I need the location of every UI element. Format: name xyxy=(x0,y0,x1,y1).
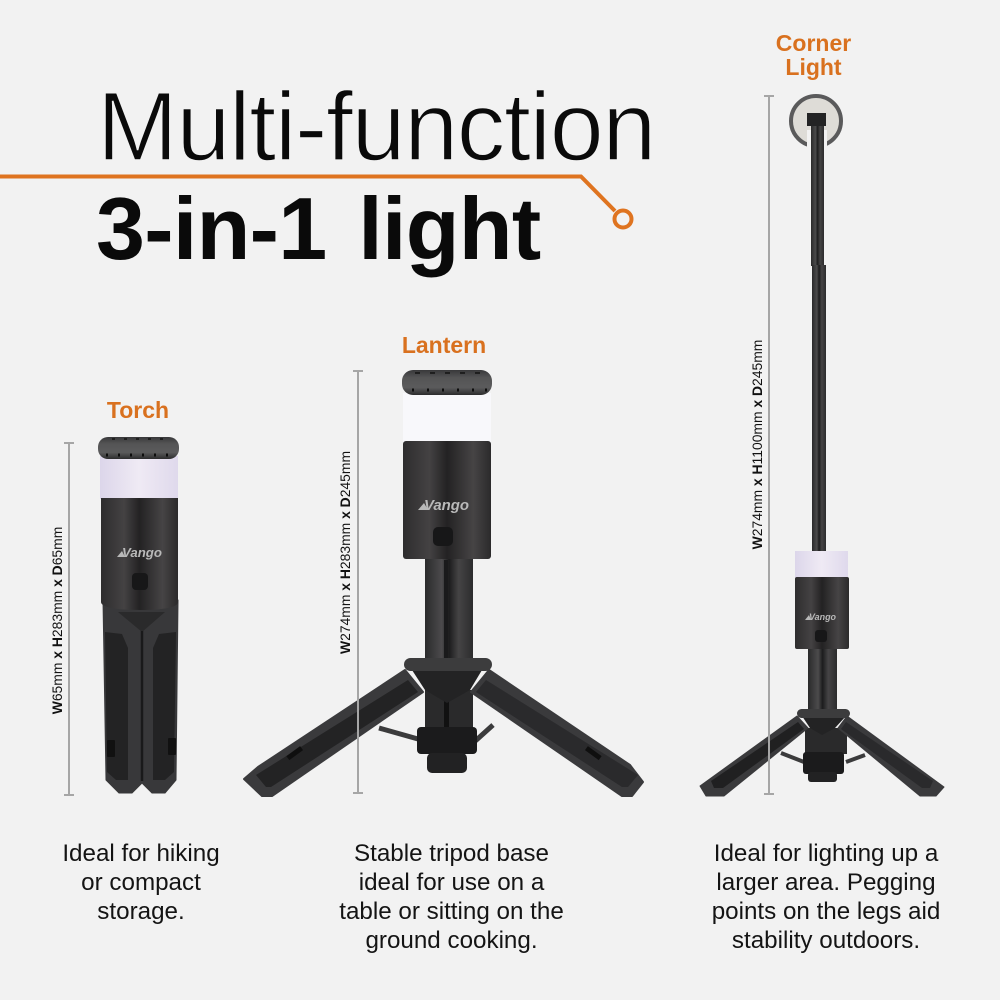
title: Multi-function: Multi-function xyxy=(97,72,655,181)
lantern button xyxy=(433,527,453,546)
text block: torch description: storage. xyxy=(97,898,185,925)
corner light body xyxy=(795,577,849,649)
text block: corner light description: Ideal for lighting up a xyxy=(714,840,938,867)
text block: corner light description: stability outdoors. xyxy=(732,927,920,954)
torch cap xyxy=(98,437,179,459)
panel: corner light xyxy=(700,30,944,796)
dimension text: lantern: W274mm x H283mm x D245mm xyxy=(337,451,353,654)
corner light button xyxy=(815,630,827,642)
corner light right leg xyxy=(838,716,944,796)
text block: corner light description: points on the legs aid xyxy=(712,898,940,925)
dimension line: corner light height xyxy=(764,96,774,794)
torch button xyxy=(132,573,148,590)
panel: lantern xyxy=(244,332,643,796)
lantern pole and base xyxy=(379,555,493,773)
corner light pole xyxy=(781,126,865,782)
panel: torch xyxy=(49,397,179,795)
orange connector line with ring xyxy=(0,176,632,228)
text block: lantern description: ideal for use on a xyxy=(359,869,545,896)
heading: Lantern: Lantern xyxy=(402,332,486,358)
text block: torch description: or compact xyxy=(81,869,201,896)
heading: Corner Light: Light xyxy=(785,54,842,80)
logo: Vango on corner light: Vango xyxy=(809,612,836,623)
logo: Vango on lantern: Vango xyxy=(424,497,469,514)
text block: lantern description: Stable tripod base xyxy=(354,840,549,867)
corner light collar xyxy=(797,709,850,735)
torch legs xyxy=(103,600,178,793)
torch body xyxy=(101,498,178,610)
lantern right leg xyxy=(471,670,643,796)
lantern light xyxy=(403,393,491,442)
text block: corner light description: larger area. Pegging xyxy=(716,869,936,896)
dimension line: lantern height xyxy=(353,371,363,793)
title: 3-in-1 light: 3-in-1 light xyxy=(96,179,541,278)
heading: Corner Light: Corner xyxy=(776,30,851,56)
torch light xyxy=(100,456,178,499)
corner light glow xyxy=(795,551,848,578)
dimension text: corner light: W274mm x H1100mm x D245mm xyxy=(749,340,765,549)
text block: lantern description: ground cooking. xyxy=(365,927,538,954)
text block: lantern description: table or sitting on the xyxy=(339,898,564,925)
lantern cap xyxy=(402,370,492,395)
text block: torch description: Ideal for hiking xyxy=(62,840,220,867)
dimension line: torch height xyxy=(64,443,74,795)
lantern body xyxy=(403,441,491,559)
dimension text: torch: W65mm x H283mm x D65mm xyxy=(49,527,65,714)
lantern collar xyxy=(404,658,492,703)
heading: Torch: Torch xyxy=(107,397,169,423)
lantern left leg xyxy=(244,670,423,796)
logo: Vango on torch: Vango xyxy=(122,545,162,560)
corner light left leg xyxy=(700,716,808,796)
corner light head xyxy=(791,96,841,150)
